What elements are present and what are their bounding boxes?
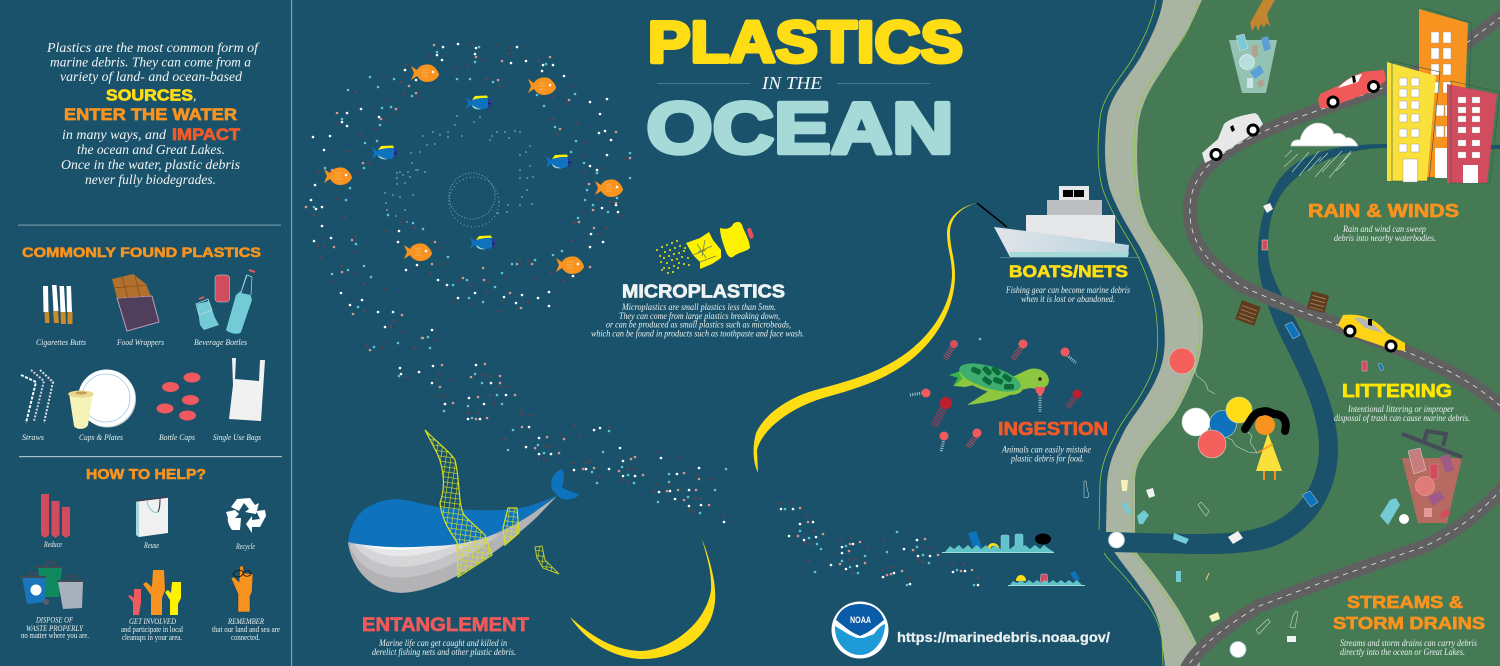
fishing net <box>425 430 559 577</box>
intro text: Plastics are the most common form of <box>46 40 260 55</box>
icon: recycle <box>226 498 266 533</box>
whale belly <box>348 496 557 593</box>
orange building <box>1419 8 1472 178</box>
icon: storm grate right <box>1307 291 1329 313</box>
icon: boat <box>977 186 1140 258</box>
section: boats and nets <box>1005 262 1130 304</box>
land: sand strip <box>1105 0 1203 666</box>
body text: plastic debris for food. <box>1010 454 1084 464</box>
icon: beverage bottles <box>196 270 255 334</box>
text: dispose of waste <box>21 616 89 640</box>
label: Cigarettes Butts <box>36 338 86 347</box>
icon: yellow car <box>1338 315 1405 351</box>
red building <box>1447 81 1500 183</box>
heading: ENTANGLEMENT <box>362 614 529 636</box>
panel: sidebar <box>18 0 292 666</box>
text: get involved <box>121 617 184 642</box>
body text: which can be found in products such as toothpaste and face wash. <box>591 328 804 338</box>
intro text: in many ways, and <box>62 127 166 142</box>
blue fish <box>372 96 572 249</box>
body text: disposal of trash can cause marine debris. <box>1334 413 1470 423</box>
text: dispose of waste: WASTE PROPERLY <box>26 624 84 633</box>
body text: Streams and storm drains can carry debris <box>1340 638 1477 648</box>
label: Bottle Caps <box>159 433 195 442</box>
title: plastics: PLASTICS <box>648 10 963 75</box>
icon: hands <box>128 570 181 615</box>
text: remember: connected. <box>231 633 260 642</box>
body text: They can come from large plastics breaking down, <box>619 311 780 321</box>
turtle <box>949 358 1049 405</box>
body text: Intentional littering or improper <box>1347 404 1454 414</box>
heading: commonly found plastics: COMMONLY FOUND PLASTICS <box>22 244 261 260</box>
label: Reduce <box>43 540 62 549</box>
road lower with dashes <box>1185 480 1500 666</box>
label: Straws <box>22 433 44 442</box>
icon: rain cloud <box>1284 123 1358 178</box>
icon: remember hand <box>231 566 253 612</box>
icon: food wrapper <box>112 274 159 331</box>
text: remember <box>212 617 280 642</box>
section: entanglement <box>362 614 529 657</box>
text: get involved: and participate in local <box>121 625 184 634</box>
section: streams and storm drains: STORM DRAINS <box>1333 613 1485 633</box>
body text <box>1340 638 1477 657</box>
section: rain and winds <box>1308 200 1459 243</box>
heading: STREAMS & <box>1347 592 1463 612</box>
text: dispose of waste: DISPOSE OF <box>35 616 73 624</box>
litter scattered on land <box>1108 480 1318 658</box>
icon: reduce bars <box>41 494 70 538</box>
icon: reuse bag <box>136 497 168 537</box>
text: get involved: cleanups in your area. <box>122 633 182 642</box>
icon: buildings <box>1387 8 1500 183</box>
text: dispose of waste: no matter where you are. <box>21 631 89 640</box>
heading: how to help: HOW TO HELP? <box>86 467 206 483</box>
icon: white car <box>1202 113 1263 163</box>
icon: overflowing trash bin <box>1380 431 1462 525</box>
intro text: , <box>193 88 196 103</box>
body text: Microplastics are small plastics less than 5mm. <box>621 302 776 312</box>
intro text: IMPACT <box>172 126 240 144</box>
intro text: Once in the water, plastic debris <box>61 157 240 172</box>
icon: trash can with litter <box>1229 34 1277 93</box>
label: Cups & Plates <box>79 433 123 442</box>
line: yellow fishing line <box>754 203 977 473</box>
title <box>646 10 963 169</box>
label: Recycle <box>235 542 255 551</box>
body text: Rain and wind can sweep <box>1342 224 1426 234</box>
body text <box>1001 444 1091 464</box>
icon: cigarette butts <box>43 285 72 324</box>
icon: red car <box>1318 70 1386 108</box>
section: microplastics <box>591 282 804 338</box>
label: Food Wrappers <box>116 338 164 347</box>
icon: whale with net <box>348 430 579 593</box>
icon: bottle caps <box>156 372 200 420</box>
text: remember: that our land and sea are <box>212 625 280 634</box>
label: Beverage Bottles <box>194 338 247 347</box>
section: ingestion <box>998 419 1108 464</box>
icon: microplastics bottle breaking up <box>657 222 754 273</box>
body text: or can be produced as small plastics such as microbeads, <box>606 320 791 330</box>
whale tail <box>551 469 579 500</box>
sidebar divider <box>291 0 292 666</box>
floating debris strip small <box>1008 571 1085 586</box>
icon: single use bag <box>229 358 265 421</box>
intro text: variety of land- and ocean-based <box>60 69 242 84</box>
body text: debris into nearby waterbodies. <box>1334 233 1436 243</box>
icon: cups and plates <box>68 370 136 429</box>
body text: Fishing gear can become marine debris <box>1005 285 1130 295</box>
balloons <box>1169 348 1257 458</box>
text: remember: REMEMBER <box>227 617 264 626</box>
icon: straws <box>21 370 53 423</box>
logo: noaa: NOAA <box>850 615 871 625</box>
icon: waste bins <box>20 561 83 609</box>
body text <box>1334 224 1436 243</box>
body text <box>591 302 804 338</box>
intro text: the ocean and Great Lakes. <box>77 142 225 157</box>
road upper with dashes <box>1190 10 1500 415</box>
litter on stream <box>1262 203 1384 371</box>
ocean litter: bottle outline <box>1084 481 1089 498</box>
plastic particle spiral <box>306 44 980 585</box>
land scene <box>1108 0 1500 658</box>
fish school <box>324 64 623 274</box>
heading: MICROPLASTICS <box>622 282 785 302</box>
girl <box>1245 411 1286 480</box>
coast and land <box>1098 0 1500 666</box>
intro text: ENTER THE WATER <box>64 106 237 124</box>
intro text <box>46 40 260 187</box>
intro text: marine debris. They can come from a <box>50 54 251 70</box>
heading: LITTERING <box>1342 381 1452 401</box>
body text <box>1005 285 1130 304</box>
stream / storm drain <box>1106 144 1500 554</box>
debris jellies <box>910 340 1082 452</box>
icon: girl with balloons <box>1169 348 1286 480</box>
logo: noaa <box>832 602 888 658</box>
body text: derelict fishing nets and other plastic debris. <box>372 647 516 657</box>
body text <box>1334 404 1470 423</box>
icon: turtle and plastic debris <box>910 340 1082 452</box>
section: littering <box>1334 381 1470 423</box>
label: Reuse <box>143 541 159 550</box>
orange fish <box>324 64 623 274</box>
body text: Marine life can get caught and killed in <box>378 638 507 648</box>
text: get involved: GET INVOLVED <box>129 617 176 626</box>
whale body <box>348 495 557 547</box>
body text: directly into the ocean or Great Lakes. <box>1340 647 1465 657</box>
icon: storm grate left <box>1235 300 1261 326</box>
body text: Animals can easily mistake <box>1001 444 1091 454</box>
title: ocean: OCEAN <box>646 89 954 169</box>
section: streams and storm drains <box>1333 592 1485 657</box>
icon: yellow fishing hook <box>570 539 715 659</box>
label: Single Use Bags <box>213 433 261 442</box>
icon: hand dropping trash <box>1250 0 1275 31</box>
land: green ground <box>1135 0 1500 666</box>
intro text: never fully biodegrades. <box>85 172 216 187</box>
heading: BOATS/NETS <box>1009 262 1128 281</box>
body text: when it is lost or abandoned. <box>1021 294 1115 304</box>
heading: RAIN & WINDS <box>1308 200 1459 221</box>
body text <box>372 638 516 657</box>
title: in the: IN THE <box>761 73 822 93</box>
yellow building <box>1387 61 1440 182</box>
floating debris strip large <box>942 531 1054 552</box>
intro text: SOURCES <box>106 88 193 104</box>
url: https://marinedebris.noaa.gov/ <box>897 629 1110 645</box>
heading: INGESTION <box>998 419 1108 439</box>
